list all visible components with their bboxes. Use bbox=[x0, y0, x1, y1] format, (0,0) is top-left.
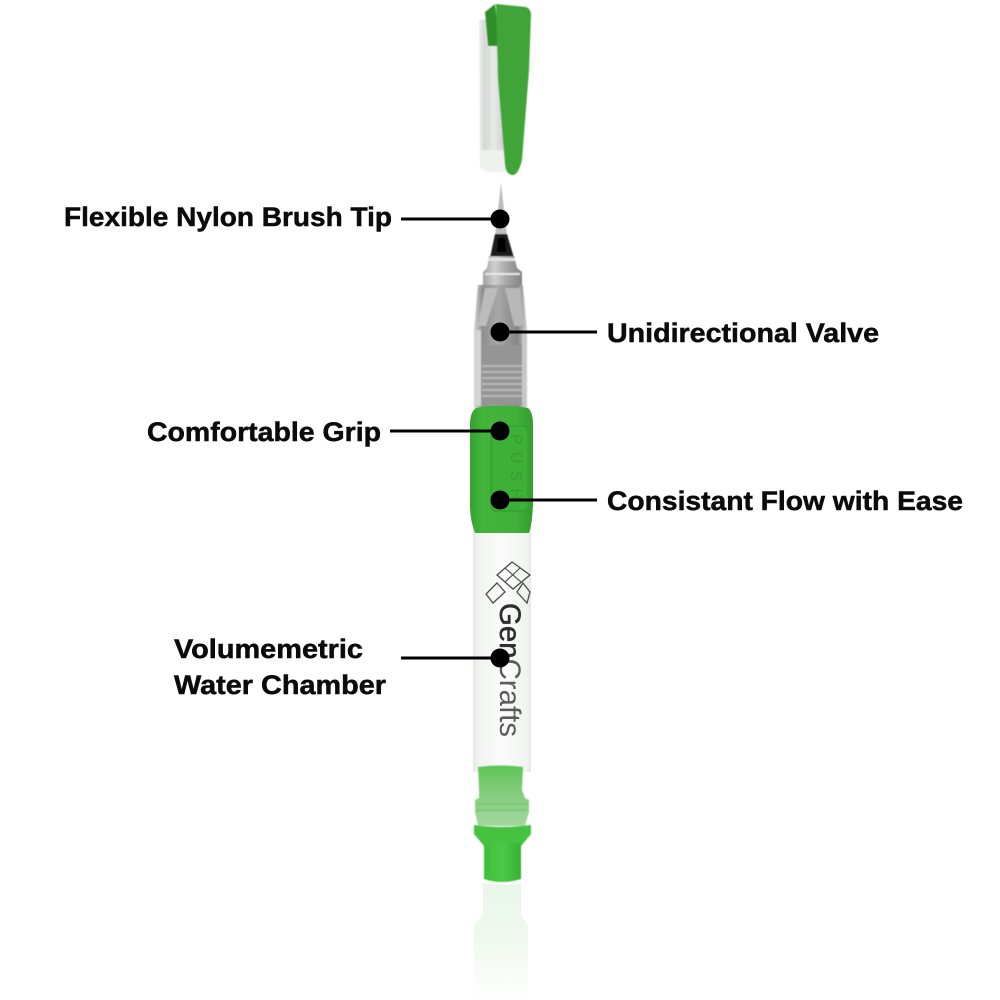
black ferrule bbox=[490, 234, 514, 258]
label: volumemetric water chamber: Water Chamber bbox=[174, 670, 387, 700]
logo icon bbox=[486, 562, 530, 603]
label: volumemetric water chamber: Volumemetric bbox=[174, 634, 363, 664]
plug stem bbox=[484, 843, 521, 882]
label: unidirectional valve bbox=[490, 318, 879, 348]
push label: PUSH bbox=[507, 434, 524, 500]
neck rings bbox=[483, 256, 522, 287]
cap green clip bbox=[496, 4, 531, 175]
leader line bbox=[500, 498, 597, 502]
cap dark green top bbox=[485, 4, 500, 46]
leader line bbox=[401, 218, 500, 220]
push button bbox=[491, 426, 528, 511]
pen reflection bbox=[474, 883, 528, 1000]
label: comfortable grip: Comfortable Grip bbox=[147, 417, 381, 447]
label: consistant flow with ease: Consistant Flow with Ease bbox=[607, 486, 963, 516]
cap clear body bbox=[479, 18, 506, 172]
water chamber bbox=[473, 528, 531, 772]
pen cap bbox=[479, 4, 531, 175]
bottom plug bbox=[474, 766, 531, 882]
label: flexible nylon brush tip: Flexible Nylon Brush Tip bbox=[64, 202, 392, 232]
brush tip bbox=[490, 183, 514, 258]
plug flange bbox=[474, 825, 531, 846]
pen neck and valve section bbox=[474, 256, 527, 408]
leader line bbox=[401, 656, 500, 660]
green grip bbox=[470, 406, 533, 533]
logo text: Gen Crafts bbox=[493, 603, 526, 737]
label: unidirectional valve: Unidirectional Valve bbox=[607, 318, 879, 348]
leader line bbox=[500, 330, 597, 334]
nylon bristle bbox=[495, 183, 507, 236]
label: comfortable grip bbox=[147, 417, 510, 447]
label: volumemetric water chamber bbox=[174, 634, 510, 700]
translucent barrel bbox=[474, 285, 527, 408]
leader line bbox=[390, 430, 500, 432]
